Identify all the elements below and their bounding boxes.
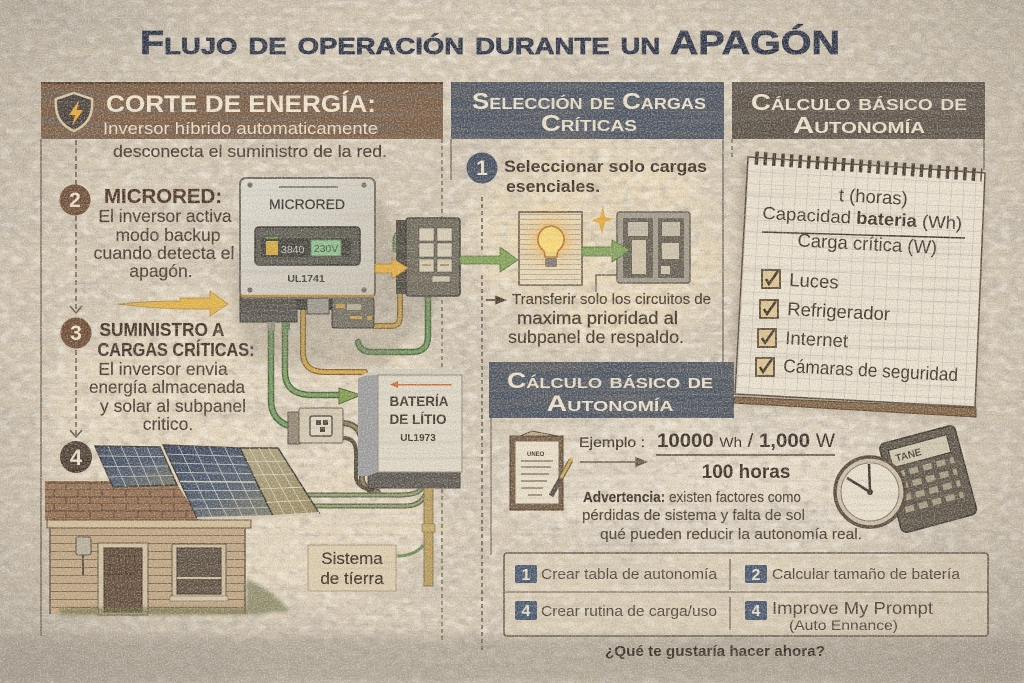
panel: cálculo básico (notebook) [732, 82, 985, 418]
step 3 text [89, 320, 254, 434]
formula: 100 horas [702, 462, 790, 483]
step 2 text: apagón. [129, 261, 193, 281]
shrubs [60, 578, 290, 615]
step 4 badge [60, 441, 92, 473]
heading: selección: Críticas [541, 110, 637, 136]
heading: autonomy [751, 89, 967, 138]
closing question: ¿Qué te gustaría hacer ahora? [605, 644, 825, 660]
step 3 text: y solar al subpanel [100, 396, 246, 416]
eave [47, 520, 251, 528]
battery label: UL1973 [400, 433, 436, 444]
checklist [756, 269, 959, 385]
action 1: Crear tabla de autonomía [541, 566, 718, 583]
warning text: Advertencia: existen factores como [583, 490, 801, 506]
step 2 badge [60, 184, 90, 216]
panel: selección de cargas críticas [451, 82, 724, 362]
connector [596, 275, 617, 292]
action 3: 4 [522, 603, 531, 620]
junction box [288, 408, 343, 444]
panel right [240, 448, 319, 516]
warning text: qué pueden reducir la autonomía real. [600, 527, 862, 543]
action 4: (Auto Ennance) [789, 617, 898, 633]
inverter display: 230V [314, 243, 338, 255]
table: next actions [504, 553, 988, 636]
step 2 text: MICRORED: [104, 186, 222, 208]
step 2 text: modo backup [115, 225, 221, 245]
inverter: microred [230, 178, 440, 370]
transfer text [508, 292, 711, 347]
panel: corte de energía [41, 82, 443, 640]
title: Flujo de operación durante un APAGÓN [140, 24, 840, 61]
step 3 text: energía almacenada [89, 377, 245, 397]
transfer text: subpanel de respaldo. [508, 327, 684, 347]
icon: load subpanel [617, 212, 690, 283]
label: sistema de tierra [308, 545, 396, 591]
arrowhead: green to battery [339, 388, 361, 404]
formula: 10000 Wh / 1,000 W [657, 431, 835, 452]
heading: selección: Selección de Cargas [472, 88, 706, 114]
step flow dashed line [70, 140, 82, 437]
step 1 badge: 1 [476, 157, 488, 180]
wall [50, 528, 245, 614]
arrow: example [580, 458, 646, 466]
notebook [732, 157, 985, 418]
inverter display [255, 227, 360, 265]
inverter label: MICRORED [269, 196, 345, 212]
heading: autonomy: Cálculo básico de [751, 89, 967, 115]
battery arrow [390, 381, 452, 388]
header: autonomy [732, 82, 985, 139]
icon: star spark [591, 205, 614, 235]
action 1: 1 [522, 567, 531, 584]
window [170, 544, 228, 601]
notebook formula: Capacidad bateria (Wh) [762, 203, 963, 233]
step 2 badge: 2 [69, 189, 81, 212]
icon: clipboard [510, 431, 572, 510]
electric meter [76, 537, 91, 575]
notebook formula: Carga crítica (W) [797, 229, 938, 258]
check: internet: Internet [785, 327, 849, 351]
check: refrigerador: Refrigerador [787, 298, 891, 324]
step 2 text: cuando detecta el [94, 243, 234, 263]
battery label: BATERÍA [390, 394, 449, 409]
step 1 text: Seleccionar solo cargas [504, 157, 707, 176]
step 3 text: critico. [143, 414, 193, 434]
notebook formula: t (horas) [838, 184, 908, 209]
label: sistema de tierra: Sistema [321, 549, 383, 568]
inverter lower housing [240, 296, 374, 330]
step 3 text: El inversor envia [98, 359, 228, 379]
label: sistema de tierra: de tíerra [320, 569, 384, 588]
solar panels [95, 445, 319, 518]
check: cámaras: Cámaras de seguridad [783, 355, 959, 385]
action 4: 4 [752, 603, 761, 620]
arrow: yellow input [118, 291, 228, 316]
arrow: yellow to subpanel [375, 258, 408, 279]
inverter standard label: UL1741 [287, 273, 325, 285]
transfer text: Transferir solo los circuitos de [512, 292, 711, 308]
notebook formula [762, 184, 965, 258]
header: selección [451, 82, 724, 139]
header: corte de energía [41, 82, 443, 139]
panel: cálculo básico (example) [482, 345, 988, 660]
step 3 text: CARGAS CRÍTICAS: [98, 339, 254, 360]
step 1 text [504, 157, 707, 196]
panel left [95, 446, 177, 487]
step 2 text: El inversor activa [98, 206, 232, 226]
heading: selección [472, 88, 706, 136]
action 3: Crear rutina de carga/uso [541, 603, 717, 620]
battery label: DE LÍTIO [390, 412, 446, 427]
subpanel [396, 218, 460, 296]
arrow: transfer bullet [486, 296, 505, 304]
arrow: green to subpanel [582, 240, 630, 262]
icon: clock [835, 457, 905, 527]
door [98, 543, 148, 615]
inverter display: 3840 [281, 244, 305, 256]
battery label [390, 394, 449, 444]
notebook spiral [755, 158, 982, 175]
grounding rod [396, 488, 435, 586]
battery [358, 369, 462, 488]
action 2: 2 [752, 567, 761, 584]
header continuation text: desconecta el suministro de la red. [113, 142, 387, 161]
warning text [582, 490, 862, 543]
icon: calculator: TANE [894, 447, 923, 465]
header: cálculo [489, 362, 734, 418]
roof [45, 481, 200, 520]
label: ejemplo: Ejemplo : [579, 434, 645, 450]
icon: clipboard: UNEO [527, 452, 545, 458]
inverter face [240, 178, 375, 298]
action 4: Improve My Prompt [772, 598, 933, 618]
step 4 badge: 4 [70, 445, 83, 470]
arrow: green to load selection [460, 247, 518, 272]
header subtitle: Inversor híbrido automaticamente [103, 119, 378, 138]
icon: shield with lightning [56, 93, 92, 131]
heading: cálculo: Cálculo básico de [507, 368, 713, 393]
step 3 badge: 3 [70, 322, 82, 345]
check: luces: Luces [789, 269, 839, 293]
heading: autonomy: Autonomía [793, 112, 926, 138]
step 1 text: esenciales. [506, 177, 600, 196]
step 3 badge [60, 318, 92, 348]
action 2: Calcular tamaño de batería [772, 566, 961, 583]
heading: cálculo: Autonomía [546, 391, 674, 416]
icon: calculator [879, 425, 978, 534]
house [45, 481, 290, 615]
check: luces [762, 269, 839, 293]
transfer text: maxima prioridad al [517, 308, 678, 328]
action 4 [745, 598, 933, 633]
wiring pipes [271, 232, 428, 506]
step 2 text [94, 186, 234, 281]
step 1 badge [466, 152, 498, 184]
heading: cálculo [507, 368, 713, 416]
step 3 text: SUMINISTRO A [100, 320, 224, 340]
heading: corte de energía: CORTE DE ENERGÍA: [106, 90, 376, 118]
icon: light bulb [508, 198, 592, 285]
panel middle [163, 445, 273, 518]
warning text: pérdidas de sistema y falta de sol [582, 508, 805, 524]
formula [656, 431, 835, 483]
